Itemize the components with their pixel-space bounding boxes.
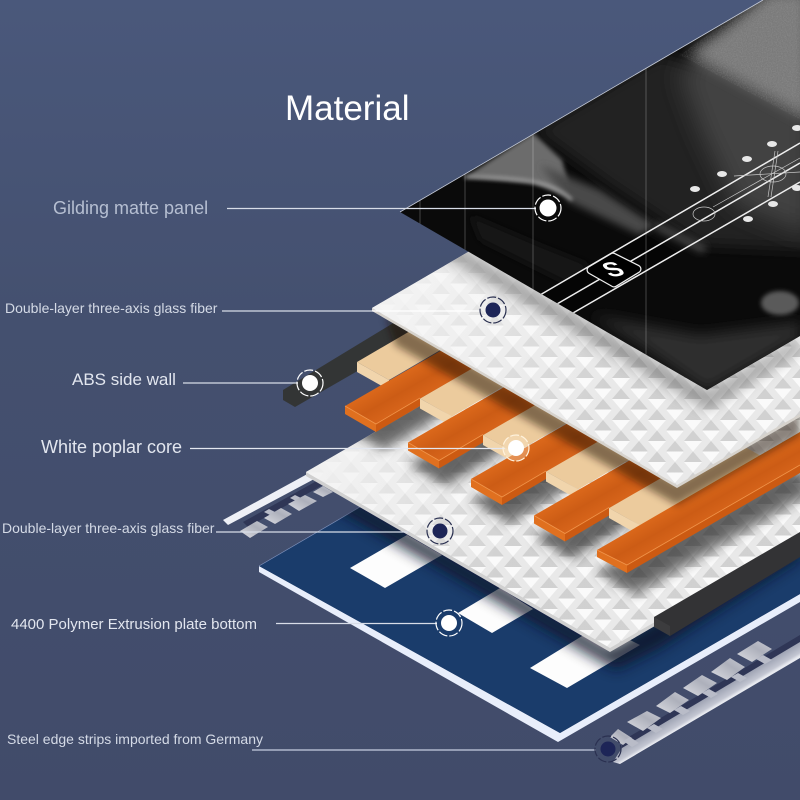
panel dots — [690, 125, 800, 222]
marker: white poplar core — [503, 435, 529, 461]
marker: polymer plate — [436, 610, 462, 636]
label: upper glass fiber: Double-layer three-axis glass fiber — [5, 300, 218, 316]
steel edge strip: right — [610, 635, 800, 764]
label: gilding matte panel: Gilding matte panel — [53, 198, 208, 218]
marker: gilding matte panel — [535, 195, 561, 221]
label: ABS side wall: ABS side wall — [72, 370, 176, 389]
plate white inlays — [350, 535, 640, 688]
plank shadows on fiber — [345, 391, 800, 594]
label: steel edge strips: Steel edge strips imported from Germany — [7, 731, 263, 747]
marker: upper glass fiber — [480, 297, 506, 323]
fiber layer: lower — [306, 387, 800, 652]
marker: ABS side wall — [297, 370, 323, 396]
label: polymer plate: 4400 Polymer Extrusion plate bottom — [11, 616, 257, 633]
white poplar core: orange planks — [345, 331, 800, 573]
fiber layer: upper — [372, 252, 800, 488]
shadow of upper fiber on core — [385, 315, 800, 505]
marker: steel edge strips — [595, 736, 621, 762]
shadow below lower fiber — [336, 507, 800, 674]
white poplar core: light planks — [357, 292, 761, 536]
panel technical marks — [693, 151, 800, 221]
steel edge strip: upper left — [223, 472, 333, 538]
ABS side wall: right bar — [654, 532, 800, 636]
title: Material — [285, 89, 409, 128]
panel logo badge: S — [597, 258, 630, 282]
ABS side wall: left strip — [283, 322, 420, 407]
marker: lower glass fiber — [427, 518, 453, 544]
label: white poplar core: White poplar core — [41, 437, 182, 457]
panel logo badge — [591, 257, 637, 283]
bottom plate — [258, 507, 800, 742]
long front plank — [597, 432, 800, 573]
gilding matte panel — [400, 0, 800, 400]
panel thin vertical lines — [420, 65, 646, 358]
panel rail lines — [540, 143, 800, 313]
label: lower glass fiber: Double-layer three-axis glass fiber — [2, 520, 215, 536]
